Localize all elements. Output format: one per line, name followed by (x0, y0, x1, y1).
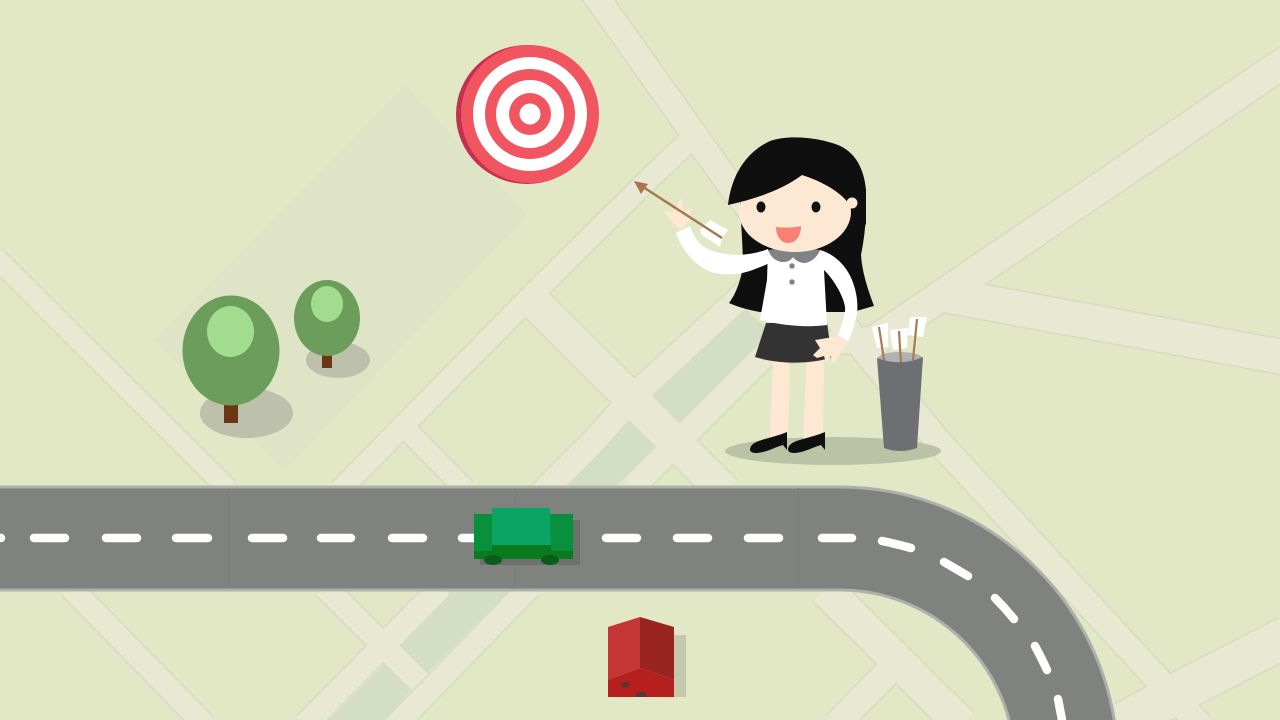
mouth (776, 226, 801, 243)
car (474, 508, 580, 565)
blouse and arms (676, 226, 857, 341)
quiver arrows (872, 317, 927, 364)
hair front (728, 137, 866, 225)
road centre dashes (0, 538, 1062, 720)
road (0, 487, 1114, 720)
tree: large (182, 296, 293, 438)
face (739, 172, 851, 252)
collar (768, 246, 820, 263)
raised hand (663, 198, 692, 230)
arrow in hand (634, 181, 728, 247)
hair back (729, 190, 874, 312)
tree: small (294, 280, 370, 378)
house (608, 617, 686, 697)
parks (329, 309, 775, 720)
target (456, 45, 599, 184)
woman with arrow and quiver (634, 137, 941, 465)
ear (846, 198, 858, 208)
shoes (750, 432, 825, 453)
quiver (877, 357, 923, 451)
skirt (755, 323, 832, 363)
hand on hip (813, 336, 848, 365)
legs (770, 355, 824, 440)
eyes (756, 202, 766, 212)
buttons (789, 263, 795, 269)
ground shadow (725, 437, 941, 465)
city block lot (155, 85, 527, 470)
